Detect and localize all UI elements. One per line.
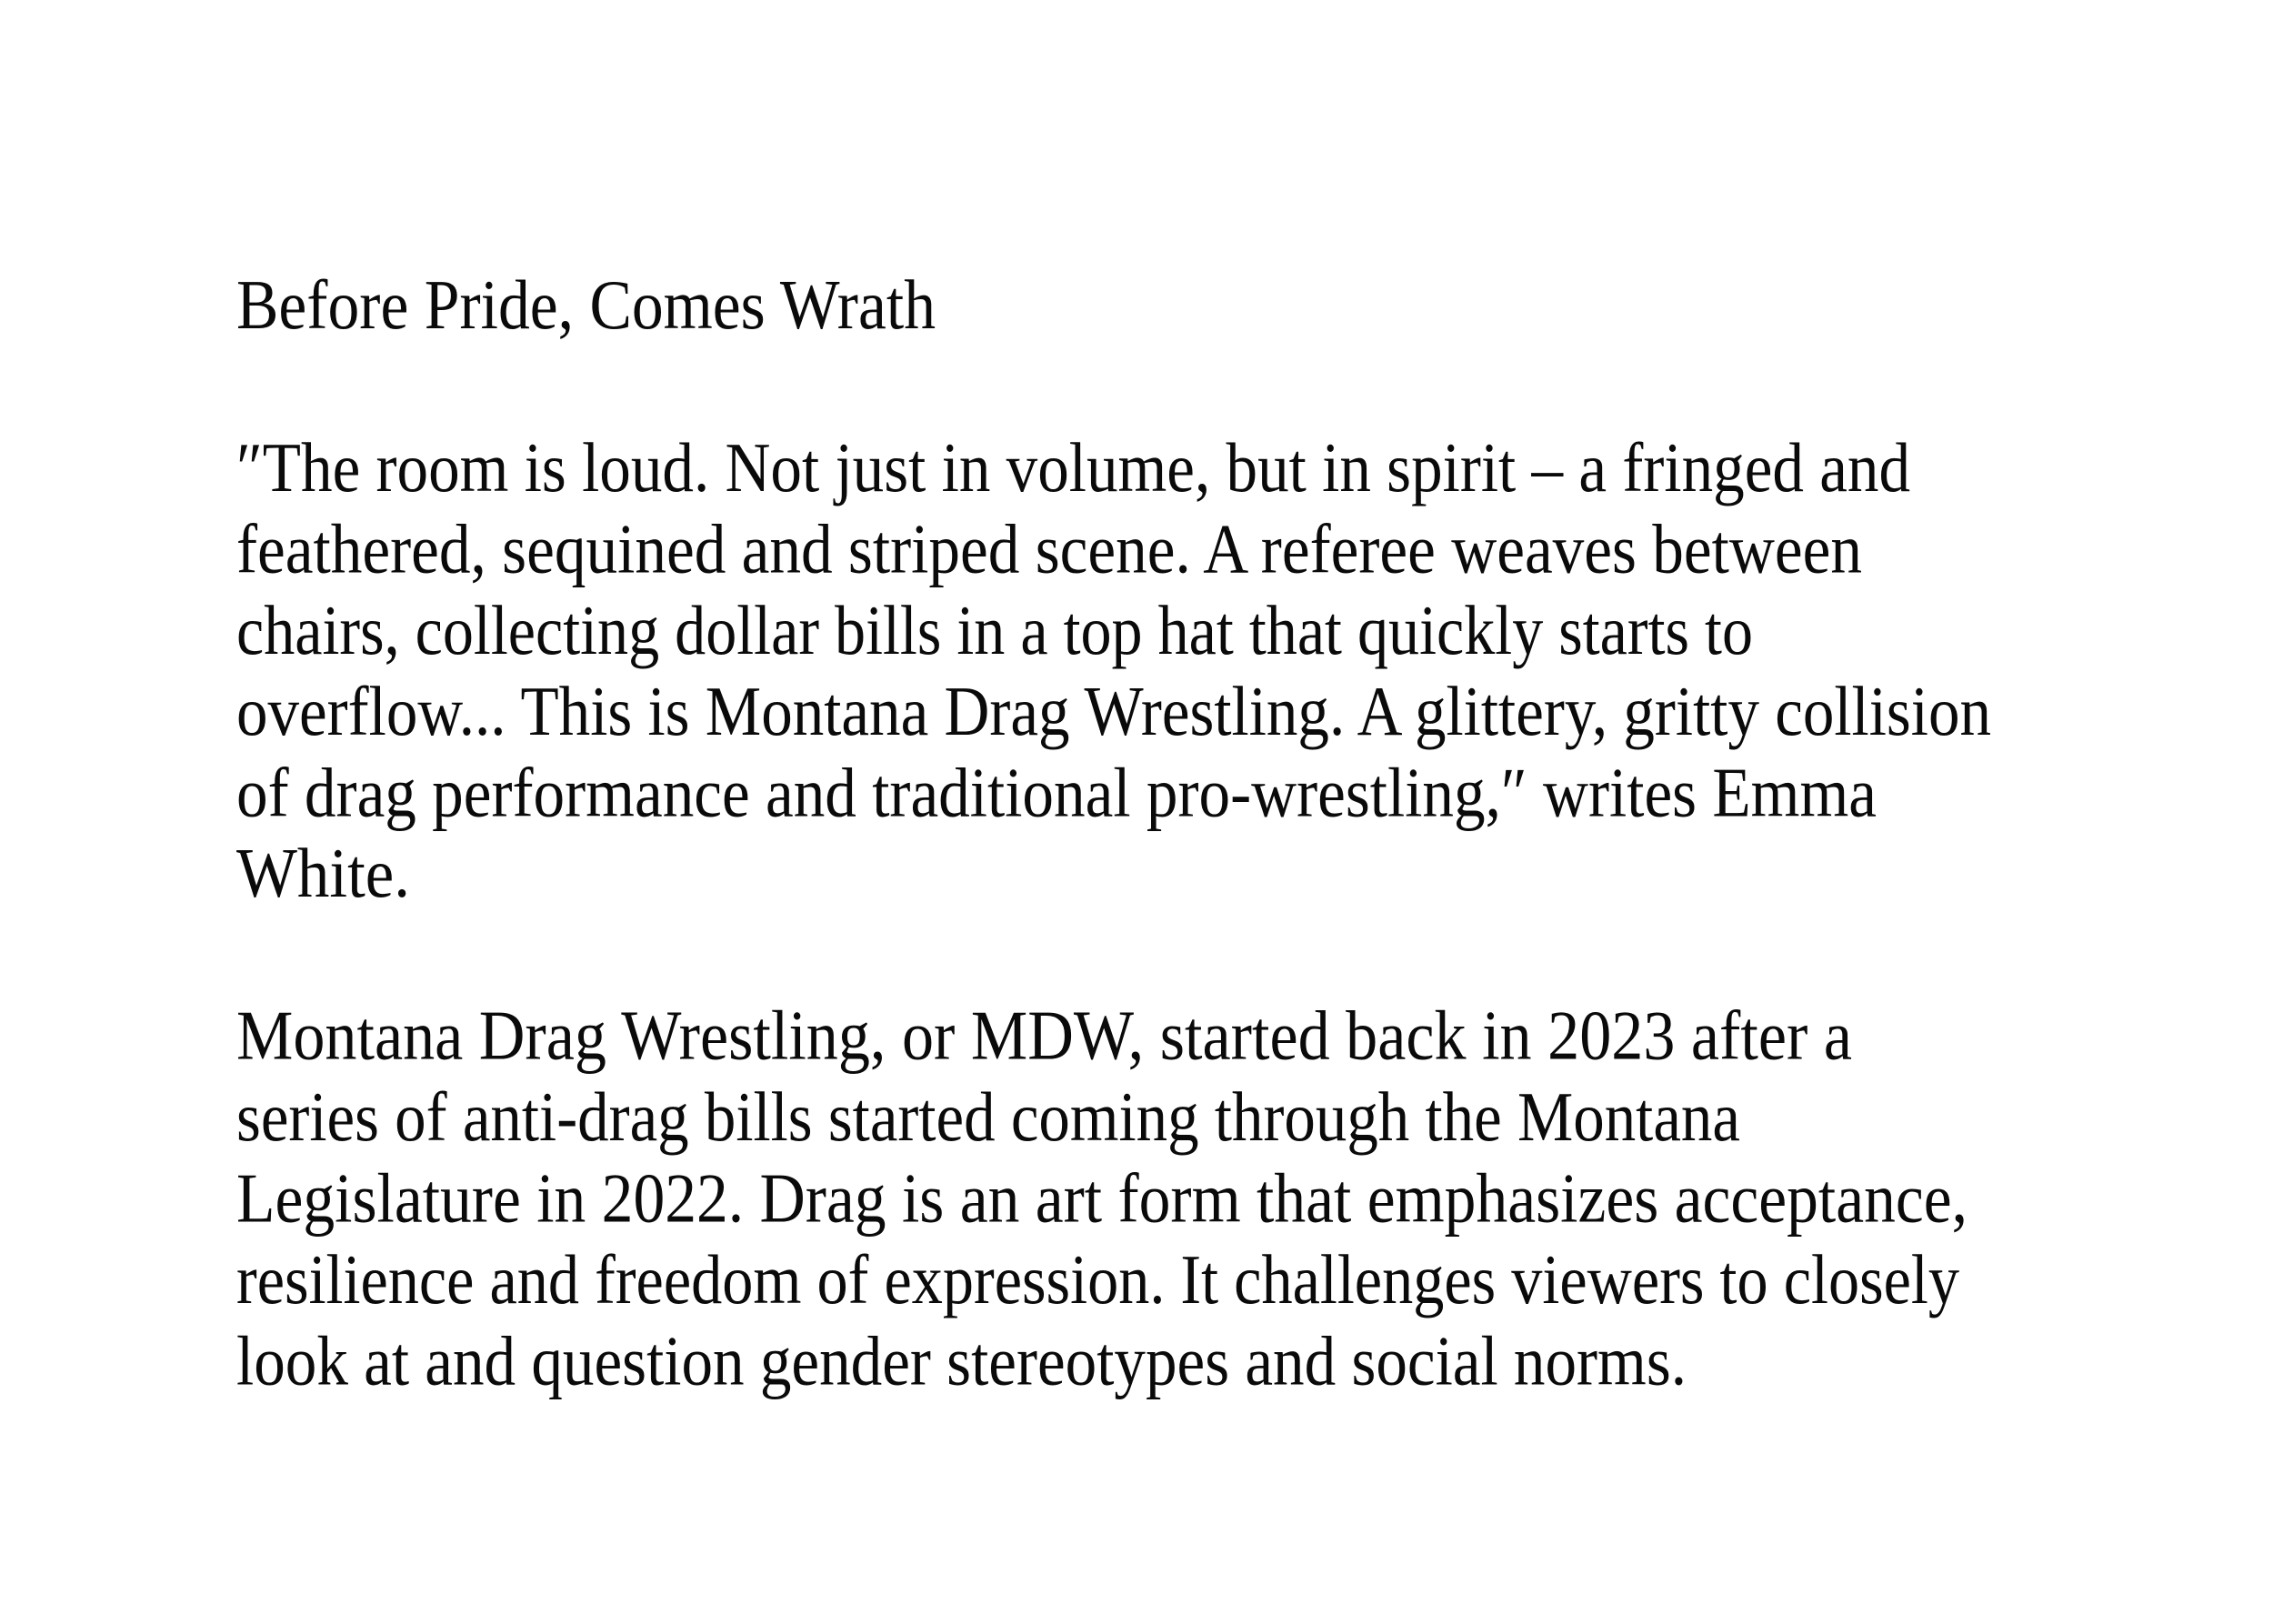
title: Before Pride, Comes Wrath bbox=[236, 266, 936, 344]
text block: background paragraph: resilience and freedom of expression. It challenges viewers to closely bbox=[236, 1240, 1959, 1318]
text block: background paragraph: series of anti-drag bills started coming through the Montana bbox=[236, 1078, 1740, 1156]
text block: opening quote paragraph: White. bbox=[236, 834, 410, 912]
text block: opening quote paragraph: ″The room is loud. Not just in volume, but in spirit – a fringed and bbox=[236, 428, 1910, 506]
text block: background paragraph bbox=[236, 997, 1968, 1400]
text block: background paragraph: Montana Drag Wrestling, or MDW, started back in 2023 after a bbox=[236, 997, 1852, 1075]
text block: background paragraph: look at and question gender stereotypes and social norms. bbox=[236, 1322, 1687, 1400]
text block: opening quote paragraph: chairs, collecting dollar bills in a top hat that quickly starts to bbox=[236, 591, 1753, 669]
text block: opening quote paragraph: overflow... This is Montana Drag Wrestling. A glittery, gritty collision bbox=[236, 672, 1991, 750]
text block: opening quote paragraph: feathered, sequined and striped scene. A referee weaves between bbox=[236, 509, 1862, 587]
text block: background paragraph: Legislature in 2022. Drag is an art form that emphasizes acceptance, bbox=[236, 1158, 1968, 1237]
text block: opening quote paragraph: of drag performance and traditional pro-wrestling,″ writes Emma bbox=[236, 753, 1877, 831]
text block: opening quote paragraph bbox=[236, 428, 1991, 912]
